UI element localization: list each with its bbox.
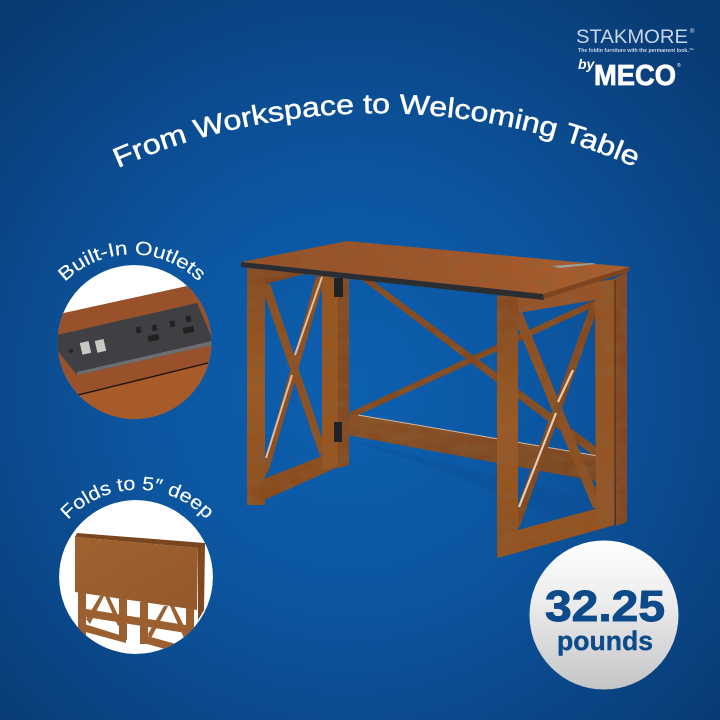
callout: folds to 5 inches deep (59, 476, 213, 654)
outlet sockets (135, 326, 142, 333)
callout: built-in outlets (58, 242, 212, 419)
power strip (57, 303, 212, 375)
logo: STAKMORE wordmark: STAKMORE (576, 27, 688, 48)
badge disc (530, 540, 678, 690)
left leg frame (247, 267, 349, 505)
callout label: Folds to 5″ deep (60, 476, 212, 519)
folding desk illustration (241, 241, 630, 558)
folded panel side (198, 544, 205, 620)
outlet photo (58, 265, 212, 419)
tabletop outlet strip (552, 263, 596, 268)
USB ports (80, 341, 91, 355)
logo: MECO registered mark: ® (677, 62, 681, 69)
callout label: Built-In Outlets (58, 242, 204, 281)
tabletop surface (241, 241, 630, 294)
bottom stretcher (347, 414, 600, 482)
right leg frame (497, 272, 627, 558)
right frame diagonal highlights (519, 370, 573, 507)
folded legs (78, 592, 194, 649)
back cross braces (348, 280, 600, 456)
logo: tagline: The foldin furniture with the permanent look.™ (578, 48, 694, 54)
folded table top edge (75, 533, 205, 548)
folded panel face (75, 537, 198, 610)
tabletop (241, 241, 630, 300)
tabletop right edge (543, 267, 630, 299)
title: From Workspace to Welcoming Table (112, 94, 638, 168)
floor shadow under desk (350, 440, 600, 520)
right frame wood (497, 272, 627, 558)
weight unit: pounds (557, 626, 653, 656)
logo: registered mark: ® (690, 28, 695, 35)
weight badge (530, 540, 678, 690)
left frame wood (247, 267, 349, 505)
right frame seam (614, 280, 616, 525)
tabletop dark front edge (241, 262, 544, 300)
hinges (334, 278, 343, 442)
left frame diagonal highlights (266, 277, 322, 458)
folded table photo (59, 500, 213, 656)
logo: MECO: MECO (594, 60, 676, 92)
brand logo (576, 27, 695, 92)
weight number: 32.25 (545, 582, 665, 631)
logo: by: by (578, 56, 596, 72)
